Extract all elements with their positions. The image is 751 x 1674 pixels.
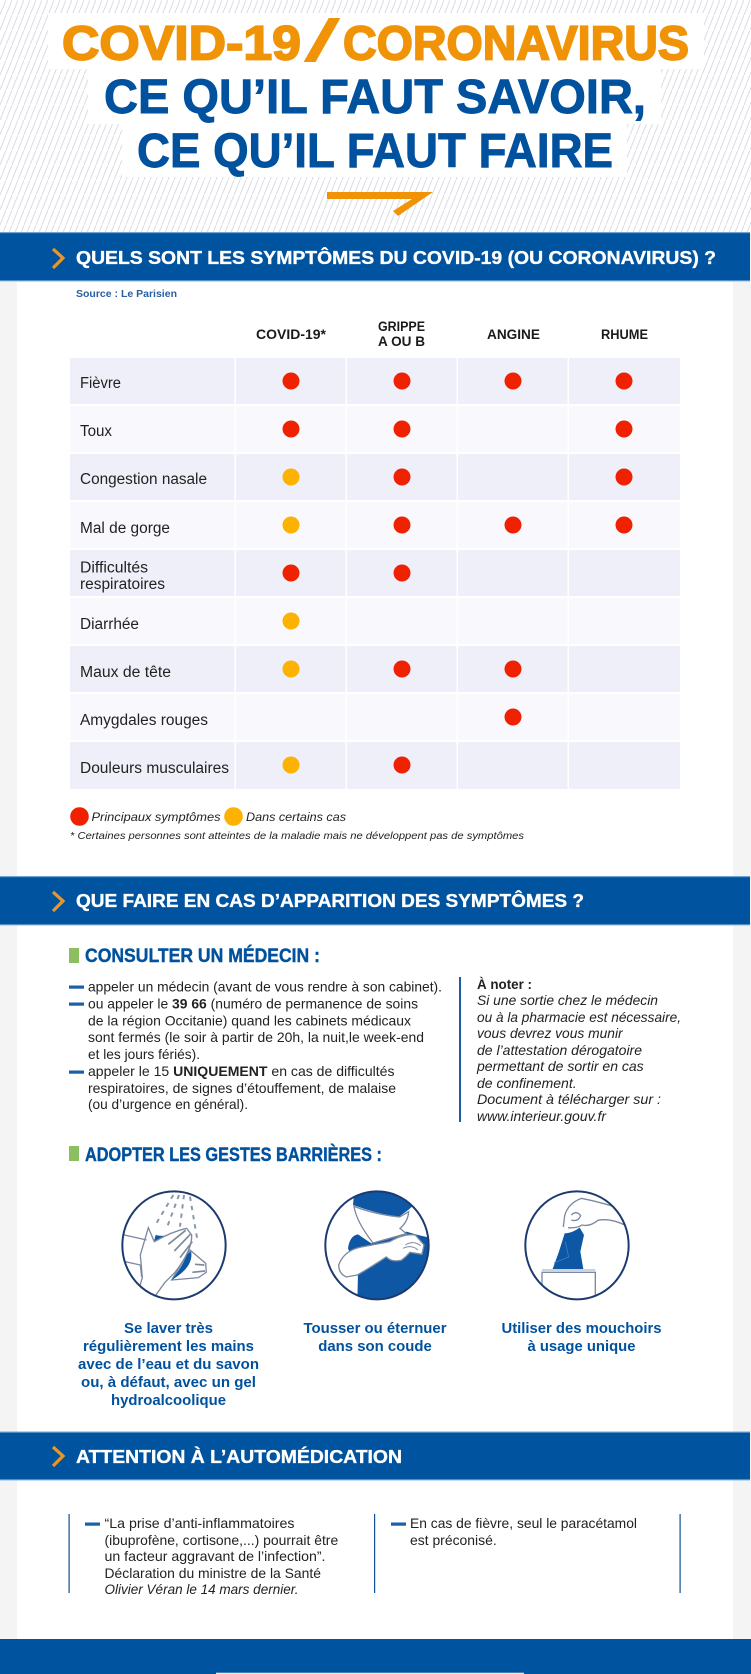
row labels: Fièvre [80, 375, 121, 392]
title: CORONAVIRUS [343, 18, 689, 70]
heading: gestes barrières: ADOPTER LES GESTES BARRIÈRES : [85, 1144, 382, 1166]
section banner: symptômes [0, 232, 750, 282]
legend: Dans certains cas [246, 812, 346, 824]
dots: angine column [504, 372, 522, 726]
list: who to call: appeler le 15 UNIQUEMENT en cas de difficultés [88, 1063, 394, 1079]
table column headers: RHUME [601, 327, 648, 342]
note: à noter: À noter : [477, 976, 532, 992]
row labels: Congestion nasale [80, 471, 207, 488]
row labels: Diarrhée [80, 616, 139, 633]
caption: tousser dans le coude: Tousser ou éternuer [304, 1320, 447, 1337]
heading: consulter un médecin: CONSULTER UN MÉDECIN : [85, 945, 320, 967]
note: à noter: www.interieur.gouv.fr [477, 1108, 607, 1124]
note: à noter [459, 976, 681, 1124]
caption: se laver les mains: Se laver très [124, 1320, 213, 1337]
symptom table [70, 319, 680, 789]
panel: déclaration du ministre [68, 1514, 338, 1597]
section banner: automédication: ATTENTION À L’AUTOMÉDICATION [76, 1446, 402, 1467]
row labels: Maux de tête [80, 664, 171, 681]
list: who to call: ou appeler le 39 66 (numéro de permanence de soins [88, 996, 418, 1012]
list: who to call: sont fermés (le soir à partir de 20h, la nuit,le week-end [88, 1029, 424, 1045]
dots: grippe column [394, 372, 410, 774]
section banner: que faire: QUE FAIRE EN CAS D’APPARITION DES SYMPTÔMES ? [76, 890, 584, 911]
section banner: que faire [0, 876, 750, 926]
panel: déclaration du ministre: Déclaration du ministre de la Santé [104, 1565, 321, 1581]
panel: déclaration du ministre: Olivier Véran le 14 mars dernier. [104, 1581, 298, 1597]
dots: rhume column [616, 372, 632, 534]
legend: Principaux symptômes [92, 812, 221, 824]
panel: déclaration du ministre: “La prise d’anti-inflammatoires [104, 1515, 294, 1531]
caption: se laver les mains: ou, à défaut, avec un gel [81, 1374, 256, 1391]
panel: déclaration du ministre: un facteur aggravant de l’infection”. [104, 1548, 326, 1564]
caption: se laver les mains: régulièrement les mains [83, 1338, 254, 1355]
title: COVID-19 [62, 18, 301, 70]
list: who to call: et les jours fériés). [88, 1046, 200, 1062]
section banner: automédication [0, 1432, 750, 1481]
panel: paracétamol: est préconisé. [410, 1532, 497, 1548]
caption: mouchoirs [502, 1320, 662, 1355]
note: à noter: de confinement. [477, 1075, 577, 1091]
caption: se laver les mains: hydroalcoolique [111, 1392, 226, 1409]
table column headers: COVID-19* [256, 327, 327, 342]
caption: se laver les mains [78, 1320, 259, 1409]
note: à noter: Document à télécharger sur : [477, 1091, 661, 1107]
note: à noter: vous devrez vous munir [477, 1025, 624, 1041]
title [48, 9, 704, 178]
row labels: respiratoires [80, 576, 165, 593]
caption: se laver les mains: avec de l’eau et du savon [78, 1356, 259, 1373]
table column headers: ANGINE [487, 327, 540, 342]
note: à noter: permettant de sortir en cas [476, 1058, 644, 1074]
icon: disposable tissue [525, 1191, 629, 1302]
list: who to call: respiratoires, de signes d’étouffement, de malaise [88, 1080, 396, 1096]
list: who to call [69, 978, 442, 1112]
caption: mouchoirs: Utiliser des mouchoirs [502, 1320, 662, 1337]
section banner: symptômes: QUELS SONT LES SYMPTÔMES DU COVID-19 (OU CORONAVIRUS) ? [76, 247, 716, 268]
panel: paracétamol [374, 1514, 681, 1593]
icon: washing hands [122, 1191, 226, 1302]
row labels [80, 375, 229, 777]
list: who to call: appeler un médecin (avant de vous rendre à son cabinet). [88, 978, 442, 994]
caption: tousser dans le coude [304, 1320, 447, 1355]
row labels: Douleurs musculaires [80, 760, 229, 777]
note: à noter: de l’attestation dérogatoire [477, 1042, 642, 1058]
list: who to call: de la région Occitanie) quand les cabinets médicaux [88, 1012, 411, 1028]
dots: COVID-19 column [282, 372, 300, 774]
table column headers: A OU B [378, 334, 425, 349]
panel: déclaration du ministre: (ibuprofène, cortisone,...) pourrait être [104, 1532, 338, 1548]
arrow [327, 192, 433, 216]
title: / [305, 9, 341, 74]
note: à noter: ou à la pharmacie est nécessaire, [477, 1009, 681, 1025]
legend: * Certaines personnes sont atteintes de la maladie mais ne développent pas de symptômes [70, 830, 525, 842]
panel: paracétamol: En cas de fièvre, seul le paracétamol [410, 1515, 637, 1531]
title: CE QU’IL FAUT FAIRE [137, 125, 613, 178]
caption: tousser dans le coude: dans son coude [318, 1338, 432, 1355]
caption: mouchoirs: à usage unique [528, 1338, 636, 1355]
list: who to call: (ou d’urgence en général). [88, 1096, 248, 1112]
footer band [0, 1639, 751, 1674]
row labels: Amygdales rouges [80, 712, 208, 729]
note: à noter: Si une sortie chez le médecin [477, 992, 658, 1008]
row labels: Mal de gorge [80, 520, 170, 537]
row labels: Toux [80, 423, 112, 440]
table column headers: GRIPPE [378, 319, 425, 334]
row labels: Difficultés [80, 560, 148, 576]
table column headers [256, 319, 648, 349]
source: Source : Le Parisien [76, 288, 177, 300]
table rows background [70, 358, 680, 789]
title: CE QU’IL FAUT SAVOIR, [104, 71, 646, 124]
icon: coughing in elbow [325, 1187, 433, 1302]
legend [70, 807, 525, 842]
